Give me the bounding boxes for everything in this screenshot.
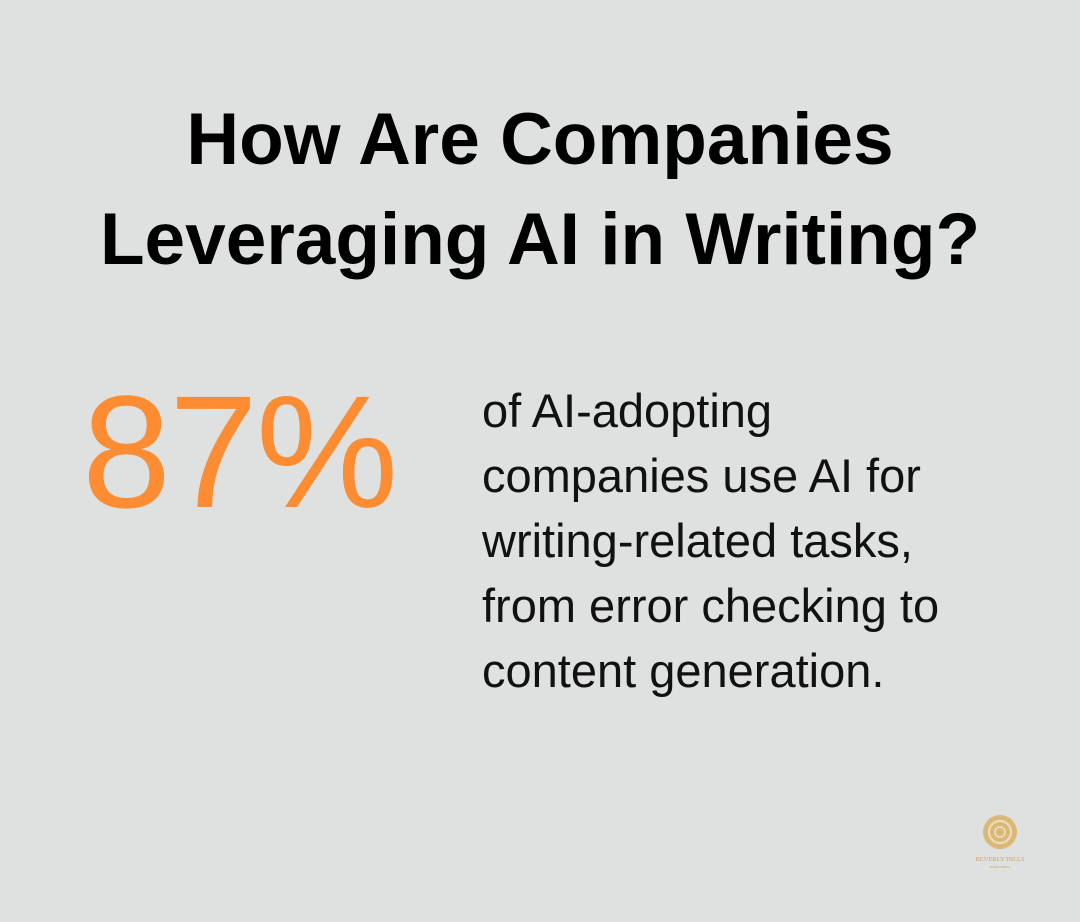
stat number: 87% (82, 362, 396, 541)
logo: PUBLISHING (990, 865, 1011, 869)
description text: writing-related tasks, (482, 514, 913, 567)
description text: content generation. (482, 644, 884, 697)
logo (975, 815, 1025, 869)
description text: companies use AI for (482, 449, 921, 502)
description text: of AI-adopting (482, 384, 772, 437)
title: How Are Companies (186, 99, 894, 180)
description text (482, 384, 939, 697)
description text: from error checking to (482, 579, 939, 632)
title: Leveraging AI in Writing? (100, 199, 980, 280)
logo: BEVERLY HILLS (975, 856, 1025, 863)
title (100, 99, 980, 280)
